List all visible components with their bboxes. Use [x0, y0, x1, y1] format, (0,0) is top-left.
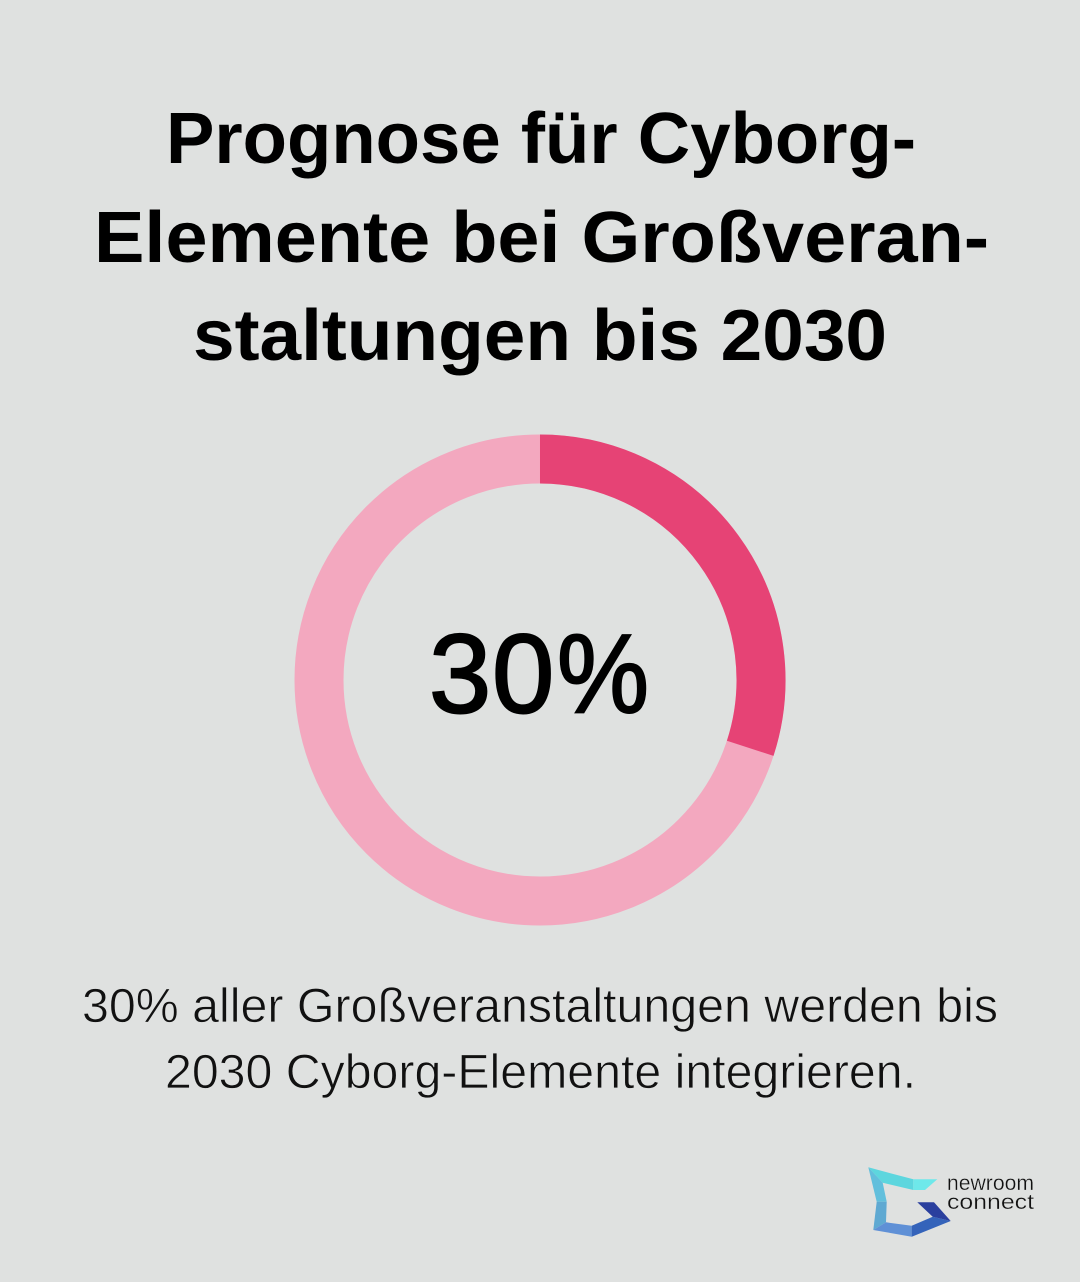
logo wordmark: newroom	[947, 1172, 1034, 1195]
title: Prognose für Cyborg-	[166, 99, 916, 179]
donut value: 30	[429, 612, 554, 736]
title	[94, 99, 989, 376]
title: Elemente bei Großveran-	[94, 198, 989, 278]
icon: logo mark	[868, 1167, 951, 1237]
logo wordmark: connect	[947, 1191, 1034, 1214]
logo wordmark	[947, 1172, 1034, 1214]
donut value: %	[557, 612, 649, 736]
donut chart: 30 percent	[319, 459, 761, 901]
title: staltungen bis 2030	[193, 296, 887, 376]
description text: 2030 Cyborg-Elemente integrieren.	[165, 1046, 916, 1099]
description text	[82, 980, 998, 1099]
logo: newroom connect	[868, 1167, 1034, 1237]
donut value	[429, 612, 649, 736]
description text: 30% aller Großveranstaltungen werden bis	[82, 980, 998, 1033]
